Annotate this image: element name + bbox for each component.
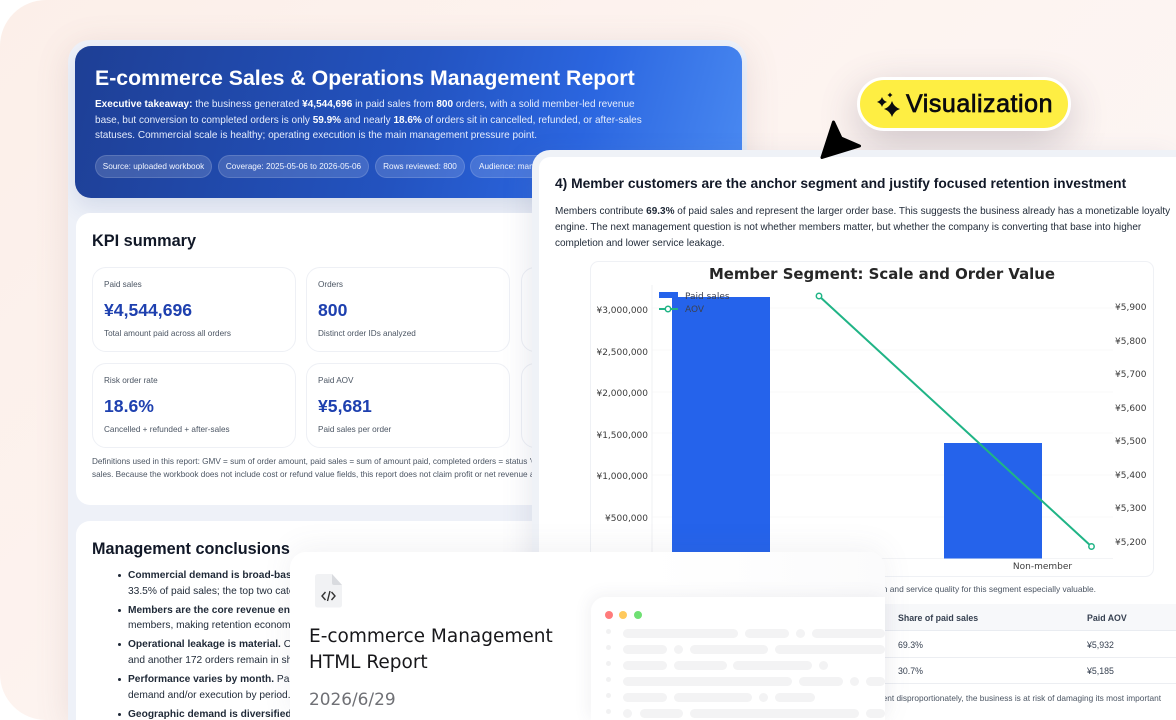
chart caption: The higher order base and order value make conversion, retention and service quality for this segment especially valuable. (642, 584, 1096, 594)
KPI: paid AOV: ¥5,681 (318, 396, 372, 416)
panel: KPI summary (76, 213, 742, 505)
chart title: Member Segment: Scale and Order Value (709, 265, 1055, 283)
tag: rows reviewed: Rows reviewed: 800 (383, 162, 457, 171)
section body text (555, 206, 1170, 249)
KPI: paid AOV (306, 363, 510, 448)
KPI: paid sales: Paid sales (104, 280, 142, 289)
table footnote: If service failures and cancellations affect the member segment disproportionately, the business is at risk of damaging its most important (662, 693, 1161, 703)
executive takeaway (95, 99, 642, 141)
conclusion: commercial demand: Commercial demand is broad-based. (128, 570, 306, 581)
legend (659, 292, 730, 315)
KPI: risk order rate: Risk order rate (104, 376, 158, 385)
table header: Share of paid sales (898, 613, 978, 623)
file title: E-commerce Management (309, 626, 553, 647)
file title: HTML Report (309, 652, 428, 673)
left axis labels: ¥1,500,000 (596, 431, 648, 441)
conclusion: operational leakage: Operational leakage is material. Orders (128, 639, 315, 650)
gridlines (652, 308, 1113, 517)
definitions note: sales. Because the workbook does not include cost or refund value fields, this report does not claim profit or net revenue as results. (92, 470, 567, 479)
report title: E-commerce Sales & Operations Management Report (95, 66, 635, 90)
conclusion: members: members, making retention economics (128, 620, 303, 631)
tag: source: Source: uploaded workbook (103, 162, 204, 171)
conclusion: operational leakage: and another 172 orders remain in shipment (128, 655, 323, 666)
tag: source (95, 155, 212, 178)
conclusion: members (128, 602, 314, 634)
conclusion: performance: Performance varies by month. Paid sales (128, 674, 324, 685)
KPI: risk order rate (92, 363, 296, 448)
right axis labels (1115, 303, 1147, 548)
section body text: engine. The next management question is not whether members matter, but whether the company is converting that base into higher (555, 222, 1141, 233)
left axis labels: ¥2,000,000 (596, 389, 648, 399)
left axis labels: ¥1,000,000 (596, 472, 648, 482)
table header: Paid AOV (1087, 613, 1127, 623)
table row: member (555, 631, 1176, 658)
right axis labels: ¥5,800 (1115, 337, 1147, 347)
definitions note: Definitions used in this report: GMV = sum of order amount, paid sales = sum of amount paid, completed orders = status 'Completed'; paid (92, 457, 592, 466)
left axis labels: ¥3,000,000 (596, 306, 648, 316)
right axis labels: ¥5,300 (1115, 504, 1147, 514)
left axis labels: ¥500,000 (605, 514, 648, 524)
conclusion: operational leakage (128, 637, 323, 669)
section body text: Members contribute 69.3% of paid sales and represent the larger order base. This suggests the business already has a monetizable loyalty (555, 206, 1170, 217)
KPI: risk order rate: Cancelled + refunded + after-sales (104, 425, 230, 434)
window controls (605, 611, 642, 619)
chart: member segment scale and order value (590, 261, 1154, 577)
legend: AOV (685, 305, 705, 315)
legend: Paid sales (685, 292, 730, 302)
tag: rows reviewed (375, 155, 465, 178)
table row: non-member: 30.7% (898, 666, 923, 676)
right axis labels: ¥5,200 (1115, 538, 1147, 548)
tag: coverage: Coverage: 2025-05-06 to 2026-05-06 (226, 162, 361, 171)
KPI: paid AOV: Paid sales per order (318, 425, 391, 434)
left axis labels: ¥2,500,000 (596, 348, 648, 358)
panel: member segment analysis (532, 150, 1176, 720)
table row: non-member: ¥5,185 (1087, 666, 1114, 676)
KPI: orders: 800 (318, 300, 347, 320)
conclusion: performance: demand and/or execution by period. (128, 690, 291, 701)
panel: report file card (290, 552, 885, 720)
icon: sparkles (877, 92, 900, 117)
tag: coverage (218, 155, 369, 178)
section body text: completion and lower service leakage. (555, 238, 725, 249)
conclusion: commercial demand: 33.5% of paid sales; the top two categories (128, 586, 322, 597)
conclusion: commercial demand (128, 568, 322, 599)
panel: report overview (68, 40, 747, 720)
executive takeaway: Executive takeaway: the business generated ¥4,544,696 in paid sales from 800 orders, with a solid member-led revenue (95, 99, 635, 110)
file date: 2026/6/29 (309, 689, 396, 709)
code skeleton lines (606, 629, 885, 718)
icon: cursor arrow (820, 120, 862, 159)
tag: audience (470, 155, 580, 178)
conclusion: performance (128, 672, 324, 703)
KPI: risk order rate: 18.6% (104, 396, 154, 416)
callout: Visualization badge (857, 77, 1071, 131)
right axis labels: ¥5,400 (1115, 471, 1147, 481)
conclusion: members: Members are the core revenue engine. (128, 604, 314, 616)
KPI: third column (521, 267, 725, 352)
KPI: orders (306, 267, 510, 352)
KPI: paid sales: ¥4,544,696 (104, 300, 192, 320)
preview window (591, 597, 885, 720)
conclusion: geographic demand: Geographic demand is diversified. (128, 709, 294, 720)
table row: non-member (555, 658, 1176, 684)
right axis labels: ¥5,600 (1115, 404, 1147, 414)
KPI: paid sales: Total amount paid across all orders (104, 329, 231, 338)
report header banner (75, 46, 742, 198)
definitions note (92, 457, 592, 479)
line: AOV (816, 293, 1094, 549)
table row: member: ¥5,932 (1087, 640, 1114, 650)
panel: management conclusions (76, 521, 742, 720)
file title (309, 626, 553, 673)
table header (555, 604, 1176, 631)
section heading: 4) Member customers are the anchor segment and justify focused retention investment (555, 176, 1126, 191)
table row: member: 69.3% (898, 640, 923, 650)
KPI: paid AOV: Paid AOV (318, 376, 354, 385)
KPI: third column lower (521, 363, 725, 448)
tag: audience: Audience: management (479, 162, 565, 171)
KPI: paid sales (92, 267, 296, 352)
left axis labels (596, 306, 648, 524)
table: member segment (885, 613, 1176, 684)
icon: html file (315, 574, 342, 608)
executive takeaway: statuses. Commercial scale is healthy; operating execution is the main management pressure point. (95, 130, 537, 141)
heading: KPI summary: KPI summary (92, 232, 196, 250)
right axis labels: ¥5,500 (1115, 437, 1147, 447)
bars: paid sales (672, 297, 1042, 567)
executive takeaway: base, but conversion to completed orders is only 59.9% and nearly 18.6% of orders sit in cancelled, refunded, or after-sales (95, 115, 642, 126)
KPI: orders: Orders (318, 280, 343, 289)
right axis labels: ¥5,900 (1115, 303, 1147, 313)
badge label: Visualization (906, 90, 1053, 118)
KPI: orders: Distinct order IDs analyzed (318, 329, 416, 338)
right axis labels: ¥5,700 (1115, 370, 1147, 380)
x axis label: Non-member (1013, 562, 1072, 572)
heading: management conclusions: Management conclusions (92, 540, 290, 558)
